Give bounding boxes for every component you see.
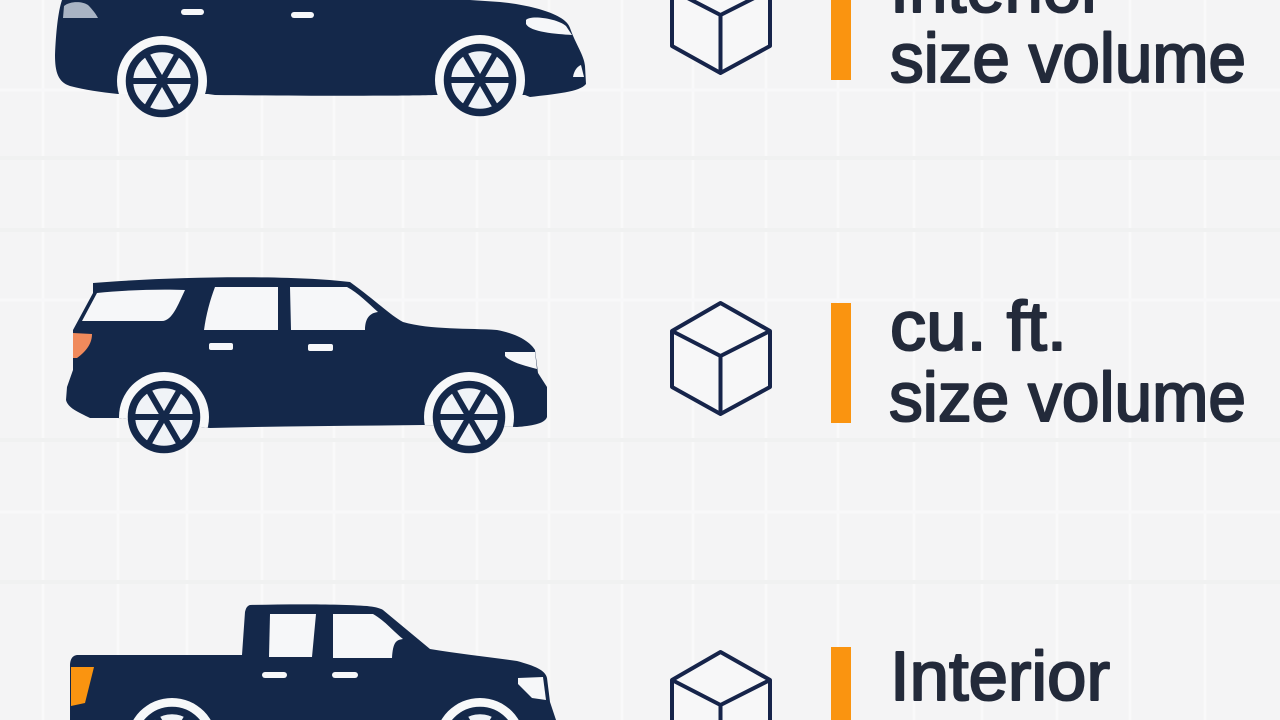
- SUV front wheel: [424, 372, 514, 462]
- label: pickup row: [890, 637, 1246, 720]
- cube icon: SUV row: [672, 303, 770, 414]
- SUV headlight: [505, 352, 537, 369]
- label: sedan row: size volume: [890, 19, 1246, 97]
- pickup headlight: [518, 677, 546, 700]
- pickup front wheel: [435, 698, 525, 720]
- SUV rear wheel: [119, 372, 209, 462]
- SUV door handles: [209, 343, 333, 351]
- pickup rear wheel: [127, 698, 217, 720]
- orange bar: SUV row: [831, 303, 851, 423]
- pickup rear window: [269, 614, 316, 657]
- sedan silhouette: [55, 0, 586, 126]
- label: SUV row: [889, 287, 1246, 436]
- orange bar: sedan row: [831, 0, 851, 80]
- SUV front window: [290, 287, 378, 330]
- cube icon: sedan row: [672, 0, 770, 73]
- pickup tail light: [71, 667, 94, 706]
- sedan rear wheel: [117, 36, 207, 126]
- sedan door handles: [181, 9, 314, 18]
- sedan tail light: [63, 2, 98, 18]
- sedan front wheel: [435, 35, 525, 125]
- label: SUV row: size volume: [889, 358, 1246, 436]
- pickup front window: [333, 614, 403, 658]
- sedan headlight: [526, 18, 572, 35]
- SUV tail light: [73, 333, 92, 358]
- label: SUV row: cu. ft.: [890, 287, 1067, 365]
- SUV rear window: [82, 290, 185, 321]
- pickup silhouette: [70, 604, 556, 720]
- sedan body: [55, 0, 586, 97]
- SUV body: [66, 277, 547, 428]
- pickup door handles: [262, 672, 358, 678]
- SUV middle window: [204, 287, 278, 330]
- cube icon: pickup row: [672, 652, 770, 720]
- label: pickup row: Interior: [890, 637, 1110, 715]
- SUV silhouette: [66, 277, 547, 462]
- sedan bumper light: [573, 65, 584, 77]
- pickup body: [70, 604, 556, 720]
- orange bar: pickup row: [831, 647, 851, 720]
